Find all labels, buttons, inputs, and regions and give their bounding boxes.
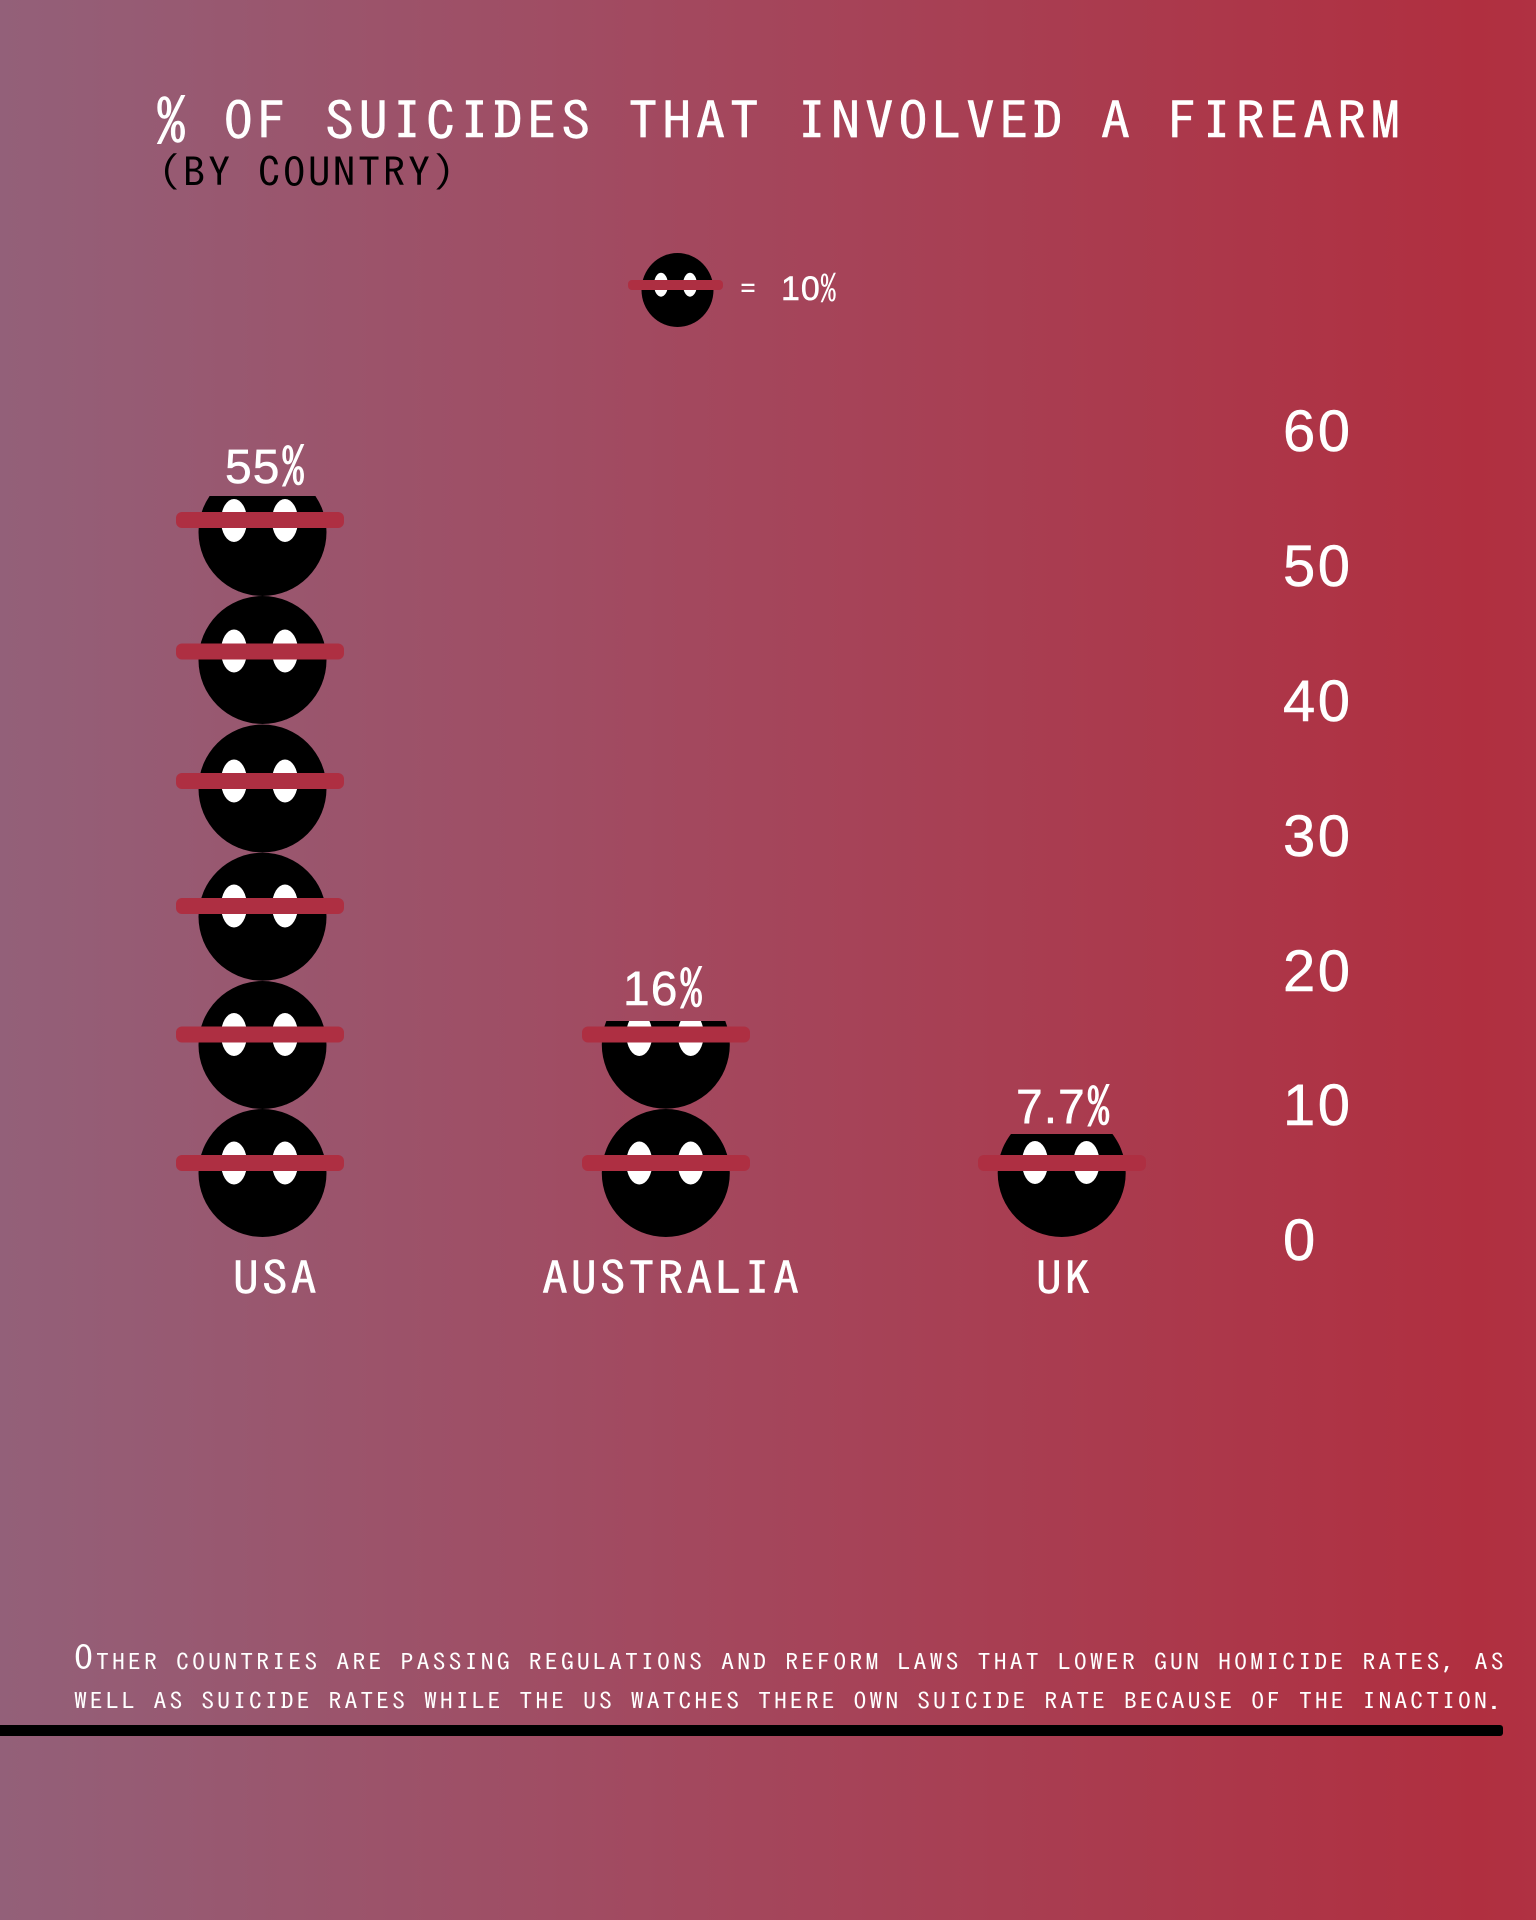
legend — [628, 253, 836, 327]
title: % — [156, 93, 216, 147]
axis labels: 40 — [1283, 669, 1353, 734]
footnote text — [74, 1641, 1507, 1712]
head 1 — [176, 1109, 344, 1237]
axis labels: 0 — [1283, 1208, 1318, 1273]
footnote text: THER COUNTRIES ARE PASSING REGULATIONS AND REFORM LAWS THAT LOWER GUN HOMICIDE RATES, AS — [96, 1650, 1507, 1673]
head 1 (partial) — [978, 1134, 1146, 1237]
head 5 — [176, 596, 344, 724]
head 1 — [582, 1109, 750, 1237]
legend label: = — [740, 272, 756, 304]
legend label: 10 — [781, 270, 821, 308]
axis labels: 10 — [1283, 1073, 1353, 1138]
head 2 — [176, 981, 344, 1109]
chart: UK column — [978, 1081, 1146, 1301]
axis labels: 30 — [1283, 804, 1353, 869]
axis labels: 50 — [1283, 534, 1353, 599]
category label: USA: USA — [233, 1254, 320, 1301]
category label: UK: UK — [1036, 1254, 1094, 1301]
divider bar — [0, 1725, 1503, 1736]
head 6 (partial) — [176, 496, 344, 596]
icon: legend head — [628, 253, 723, 327]
axis labels — [1283, 399, 1353, 1273]
head 4 — [176, 724, 344, 852]
category label: Australia: AUSTRALIA — [542, 1254, 802, 1301]
head 2 (partial) — [582, 1021, 750, 1109]
chart: Australia column — [542, 963, 802, 1301]
footnote text: WELL AS SUICIDE RATES WHILE THE US WATCHES THERE OWN SUICIDE RATE BECAUSE OF THE INACTION. — [74, 1689, 1506, 1712]
axis labels: 60 — [1283, 399, 1353, 464]
value label: 7.7%: 7.7% — [1016, 1081, 1110, 1134]
title: OF SUICIDES THAT INVOLVED A FIREARM — [224, 94, 1404, 147]
value label: 55%: 55% — [225, 441, 305, 494]
legend label: % — [820, 271, 836, 304]
head 3 — [176, 853, 344, 981]
value label: 16%: 16% — [623, 963, 703, 1016]
subtitle: (BY COUNTRY) — [158, 153, 458, 193]
footnote text: O — [74, 1641, 96, 1675]
chart: USA column — [176, 441, 344, 1301]
axis labels: 20 — [1283, 939, 1353, 1004]
